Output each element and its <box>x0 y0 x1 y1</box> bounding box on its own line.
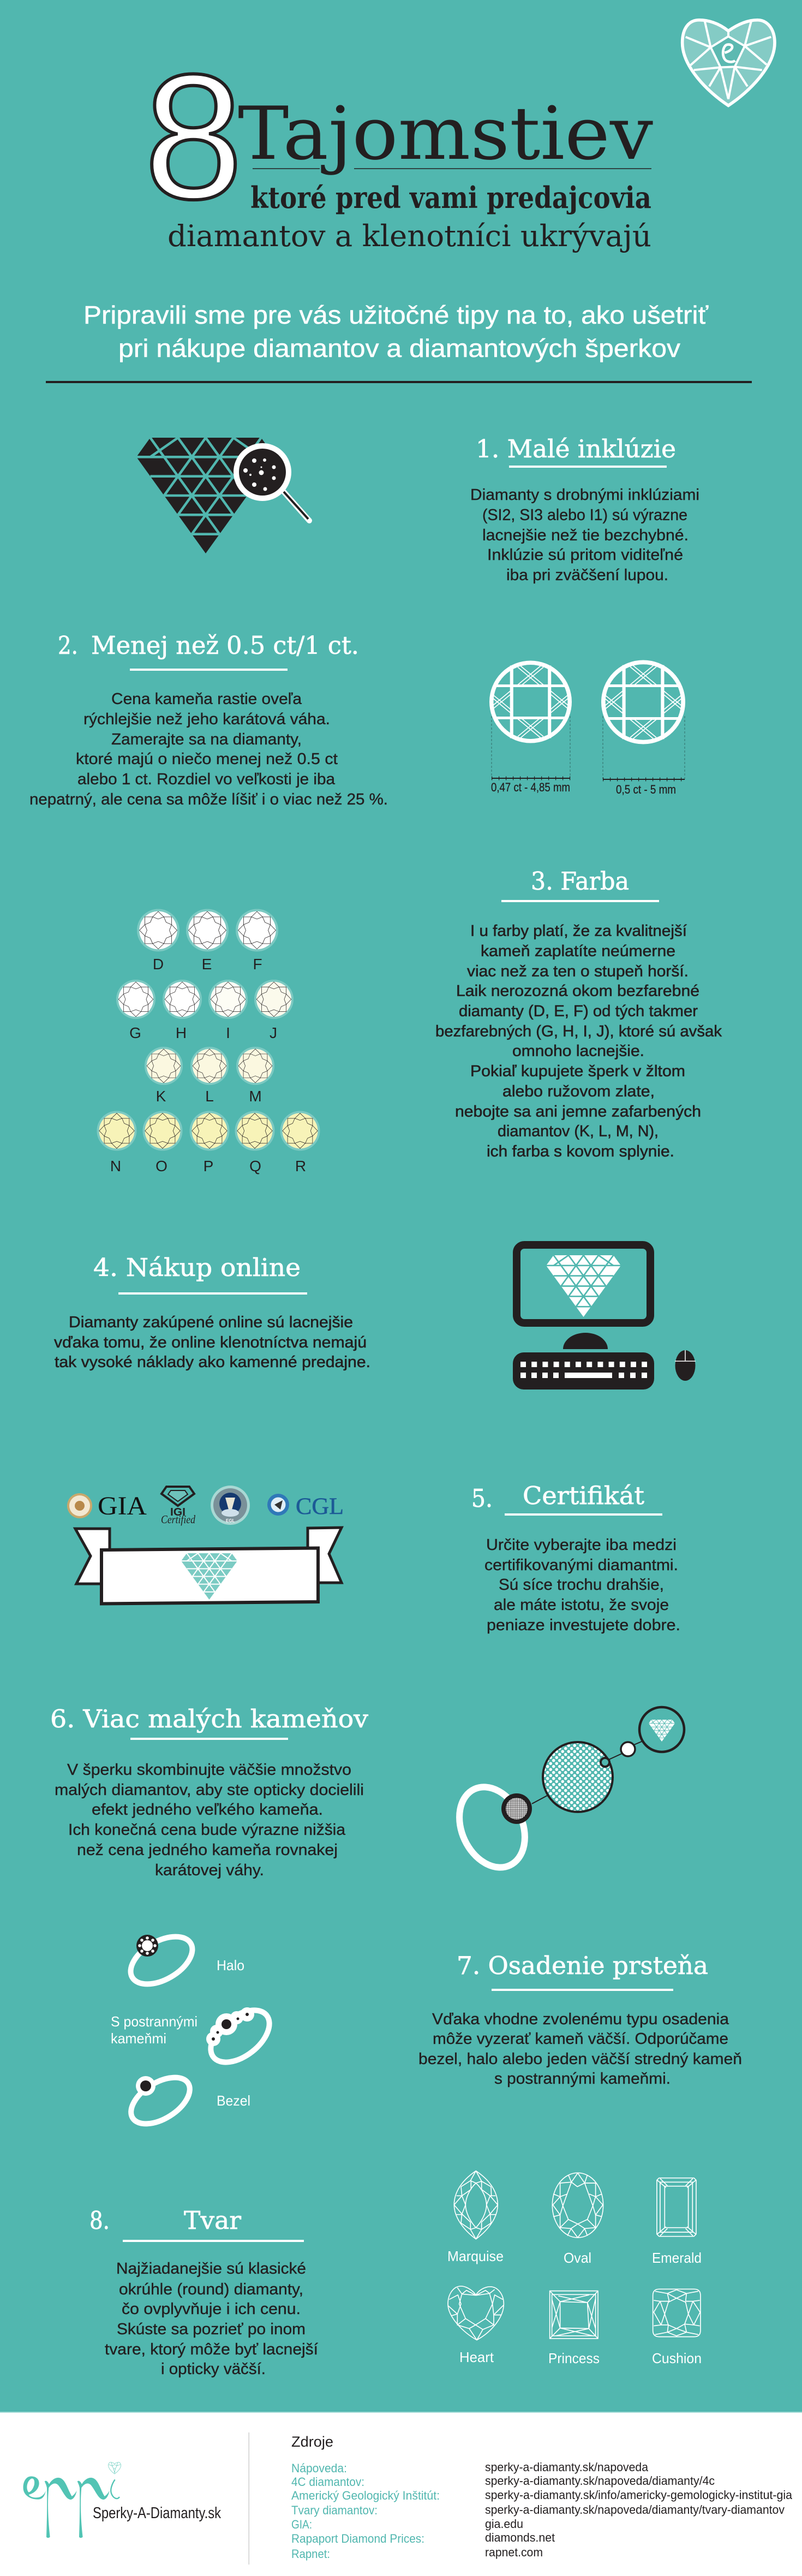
panel: 6 small stones <box>50 1704 684 1879</box>
body text: Cena kameňa rastie oveľa <box>111 690 302 708</box>
big outlined number 8: 8 <box>144 38 243 236</box>
body text: (SI2, SI3 alebo I1) sú výrazne <box>482 506 687 524</box>
icon: certificate ribbon <box>75 1528 342 1603</box>
chart: colour scale diamonds: N <box>110 1158 121 1174</box>
heading: Menej než 0.5 ct/1 ct. <box>91 631 359 660</box>
logo: EGL <box>211 1486 250 1525</box>
panel: 7 setting <box>111 1927 742 2133</box>
body text: okrúhle (round) diamanty, <box>119 2281 303 2298</box>
shape labels: Princess <box>548 2350 600 2366</box>
icon: brand heart <box>683 20 775 105</box>
chart: colour scale diamonds: H <box>176 1024 187 1041</box>
icon: diamond with magnifier <box>136 438 309 553</box>
body text <box>418 2011 742 2088</box>
heading: Tvar <box>184 2206 241 2235</box>
body text: rýchlejšie než jeho karátová váha. <box>83 711 330 728</box>
sources list labels: Rapaport Diamond Prices: <box>291 2532 424 2545</box>
icon: halo ring <box>123 1927 200 1994</box>
sources list values: gia.edu <box>485 2517 523 2531</box>
icon: side stone ring <box>201 2000 279 2073</box>
title block <box>144 38 653 253</box>
body text <box>54 1314 370 1371</box>
body text: Najžiadanejšie sú klasické <box>116 2260 306 2277</box>
label: side stones: S postrannými <box>111 2013 197 2030</box>
body text: nepatrný, ale cena sa môže líšiť i o viac než 25 %. <box>29 791 388 808</box>
logo: GIA <box>67 1492 147 1520</box>
body text: než cena jedného kameňa rovnakej <box>77 1841 338 1859</box>
heading: 6. Viac malých kameňov <box>50 1704 369 1733</box>
panel: 5 certificate <box>67 1481 680 1634</box>
subtitle line 1: ktoré pred vami predajcovia <box>250 180 651 215</box>
title rule <box>253 168 651 169</box>
body text: omnoho lacnejšie. <box>512 1042 644 1060</box>
heading: 7. Osadenie prsteňa <box>457 1951 708 1980</box>
sources list labels: 4C diamantov: <box>291 2475 364 2489</box>
body text <box>105 2260 318 2378</box>
label: halo: Halo <box>217 1957 244 1973</box>
diagram: diamond size comparison: 0,47 ct - 4,85 mm <box>491 780 570 794</box>
panel: 2 under carat <box>29 631 685 808</box>
chart: colour scale diamonds: D <box>153 956 164 973</box>
intro text: pri nákupe diamantov a diamantových šperkov <box>118 334 680 362</box>
sources list labels: Americký Geologický Inštitút: <box>291 2489 440 2502</box>
body text: bezel, halo alebo jeden väčší stredný kameň <box>418 2050 742 2068</box>
chart: colour scale diamonds: J <box>270 1024 277 1041</box>
sources list labels <box>291 2461 440 2561</box>
sources list labels: Nápoveda: <box>291 2461 347 2475</box>
subtitle line 2: diamantov a klenotníci ukrývajú <box>167 219 651 253</box>
body text: Určite vyberajte iba medzi <box>486 1536 677 1554</box>
title word: Tajomstiev <box>238 91 653 176</box>
logo: IGI: Certified <box>161 1513 195 1526</box>
logos: certification labs <box>67 1486 344 1526</box>
body text: certifikovanými diamantmi. <box>484 1557 678 1574</box>
body text: Diamanty zakúpené online sú lacnejšie <box>69 1314 353 1331</box>
shape: heart <box>448 2286 504 2340</box>
chart: colour scale diamonds: K <box>156 1088 166 1105</box>
panel: 3 colour <box>97 867 722 1174</box>
body text: diamantov (K, L, M, N), <box>498 1123 659 1140</box>
body text: môže vyzerať kameň väčší. Odporúčame <box>433 2030 728 2048</box>
intro text <box>83 301 709 362</box>
body text: ktoré majú o niečo menej než 0.5 ct <box>76 750 338 768</box>
heading: 3. Farba <box>531 867 629 896</box>
shape: princess <box>550 2291 598 2339</box>
body text: čo ovplyvňuje i ich cenu. <box>122 2300 301 2318</box>
body text <box>470 486 699 584</box>
body text: tvare, ktorý môže byť lacnejší <box>105 2341 318 2358</box>
panel: 4 online <box>54 1245 696 1390</box>
body text <box>55 1761 364 1879</box>
body text: Pokiaľ kupujete šperk v žltom <box>470 1063 685 1080</box>
label: side stones <box>111 2013 197 2047</box>
heading: 5. <box>471 1484 493 1513</box>
body text: alebo ružovom zlate, <box>502 1083 655 1100</box>
body text: lacnejšie než tie bezchybné. <box>482 527 689 544</box>
body text: efekt jedného veľkého kameňa. <box>92 1801 323 1818</box>
panel: 8 shape <box>89 2171 702 2378</box>
sources list labels: Tvary diamantov: <box>291 2503 378 2517</box>
body text: I u farby platí, že za kvalitnejší <box>470 922 687 940</box>
logo: IGI <box>161 1487 195 1526</box>
logo: script mark <box>23 2462 121 2538</box>
body text: Laik nerozozná okom bezfarebné <box>456 982 699 1000</box>
sources list values: sperky-a-diamanty.sk/napoveda <box>485 2460 649 2474</box>
body text: Ich konečná cena bude výrazne nižšia <box>68 1821 346 1839</box>
heading: 4. Nákup online <box>93 1253 301 1282</box>
body text: Diamanty s drobnými inklúziami <box>470 486 699 504</box>
heading: 2. <box>58 631 78 660</box>
body text: V šperku skombinujte väčšie množstvo <box>67 1761 351 1779</box>
sources list labels: GIA: <box>291 2518 312 2531</box>
body text: nebojte sa ani jemne zafarbených <box>455 1103 701 1120</box>
heading: 1. Malé inklúzie <box>476 434 676 463</box>
body text: Sú síce trochu drahšie, <box>499 1576 664 1594</box>
body text <box>435 922 722 1160</box>
diagram: ring magnified <box>447 1707 684 1878</box>
logo: CGL: CGL <box>296 1494 344 1519</box>
body text: vďaka tomu, že online klenotníctva nemajú <box>54 1334 367 1351</box>
logo: IGI: IGI <box>170 1506 185 1518</box>
logo: CGL <box>267 1494 344 1519</box>
body text: ich farba s kovom splynie. <box>487 1143 674 1160</box>
chart: colour scale diamonds: E <box>202 956 212 973</box>
diagram: diamond size comparison: 0,5 ct - 5 mm <box>616 783 676 796</box>
sources list values: diamonds.net <box>485 2531 555 2544</box>
shape labels: Heart <box>459 2349 494 2365</box>
icon: bezel ring <box>123 2068 197 2133</box>
shape labels: Emerald <box>652 2250 702 2266</box>
sources list labels: Rapnet: <box>291 2547 330 2561</box>
body text: Vďaka vhodne zvolenému typu osadenia <box>432 2011 729 2028</box>
label: side stones: kameňmi <box>111 2030 166 2047</box>
body text: iba pri zväčšení lupou. <box>506 567 668 584</box>
sources list values: sperky-a-diamanty.sk/napoveda/diamanty/tvary-diamantov <box>485 2503 785 2517</box>
logo: GIA: GIA <box>98 1492 147 1520</box>
body text: viac než za ten o stupeň horší. <box>467 963 689 980</box>
body text <box>29 690 388 808</box>
shape labels: Marquise <box>447 2248 504 2264</box>
sources list values <box>485 2460 793 2559</box>
shape: emerald <box>657 2178 696 2237</box>
body text: Inklúzie sú pritom viditeľné <box>487 546 683 564</box>
chart: colour scale diamonds: G <box>129 1024 141 1041</box>
body text: tak vysoké náklady ako kamenné predajne. <box>55 1353 370 1371</box>
shape labels: Cushion <box>652 2350 702 2366</box>
body text: peniaze investujete dobre. <box>487 1617 680 1634</box>
chart: colour scale diamonds: I <box>226 1024 230 1041</box>
chart: colour scale diamonds <box>97 909 320 1174</box>
shape: oval <box>552 2173 603 2238</box>
body text: bezfarebných (G, H, I, J), ktoré sú avšak <box>435 1023 722 1040</box>
chart: colour scale diamonds: L <box>205 1088 214 1105</box>
label: bezel: Bezel <box>217 2092 250 2109</box>
diamond shapes grid <box>447 2171 702 2366</box>
chart: colour scale diamonds: F <box>253 956 262 973</box>
chart: colour scale diamonds: R <box>295 1158 306 1174</box>
sources list values: rapnet.com <box>485 2545 543 2559</box>
body text: malých diamantov, aby ste opticky docielili <box>55 1781 364 1799</box>
body text: s postrannými kameňmi. <box>494 2070 671 2088</box>
chart: colour scale diamonds: M <box>249 1088 262 1105</box>
panel: footer <box>0 2412 802 2576</box>
heading <box>471 1481 644 1513</box>
shape: cushion <box>653 2289 701 2337</box>
heading <box>89 2206 241 2235</box>
body text: i opticky väčší. <box>161 2360 266 2378</box>
body text <box>484 1536 680 1634</box>
diagram: diamond size comparison <box>491 662 685 796</box>
chart: colour scale diamonds: Q <box>249 1158 261 1174</box>
shape labels: Oval <box>564 2250 591 2266</box>
logo: wordmark: Sperky-A-Diamanty.sk <box>93 2505 221 2522</box>
icon: computer <box>513 1245 696 1390</box>
panel: 1 inclusions <box>136 434 699 584</box>
body text: kameň zaplatíte neúmerne <box>481 943 675 960</box>
sources list values: sperky-a-diamanty.sk/info/americky-gemologicky-institut-gia <box>485 2488 793 2502</box>
heading: Certifikát <box>523 1481 644 1510</box>
body text: alebo 1 ct. Rozdiel vo veľkosti je iba <box>77 771 336 788</box>
sources heading: Zdroje <box>291 2434 333 2450</box>
chart: colour scale diamonds: P <box>204 1158 213 1174</box>
logo: EGL: EGL <box>226 1518 235 1523</box>
shape labels <box>447 2248 702 2366</box>
body text: Zamerajte sa na diamanty, <box>111 731 302 748</box>
shape: marquise <box>454 2171 498 2239</box>
heading: 8. <box>89 2206 110 2235</box>
body text: karátovej váhy. <box>155 1862 264 1879</box>
intro text: Pripravili sme pre vás užitočné tipy na to, ako ušetriť <box>83 301 709 329</box>
body text: ale máte istotu, že svoje <box>494 1596 669 1614</box>
chart: colour scale diamonds: O <box>155 1158 167 1174</box>
body text: diamanty (D, E, F) od tých takmer <box>459 1003 698 1020</box>
body text: Skúste sa pozrieť po inom <box>117 2321 306 2338</box>
sources list values: sperky-a-diamanty.sk/napoveda/diamanty/4c <box>485 2474 715 2488</box>
